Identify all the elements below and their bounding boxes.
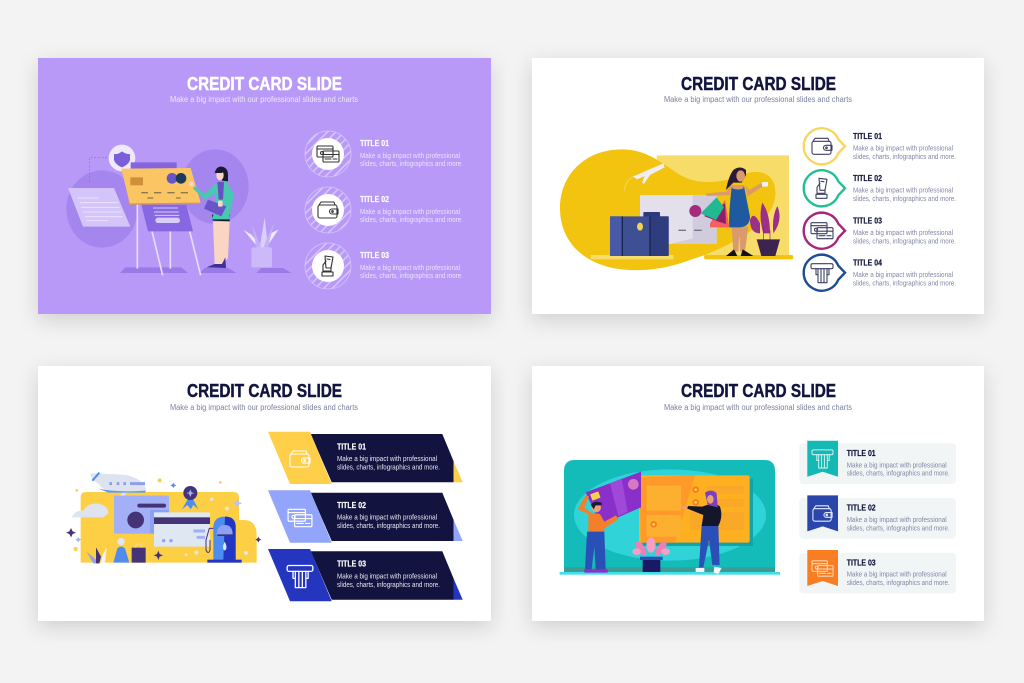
heading: slide 2 <box>664 74 852 104</box>
item 01: TITLE 01 <box>337 441 366 451</box>
item 01: TITLE 01 <box>847 448 876 458</box>
item 01: slides, charts, infographics and more. <box>853 154 956 161</box>
item 02 <box>305 187 463 233</box>
item 03: Make a big impact with professional <box>847 572 947 579</box>
item 02: slides, charts, infographics and more. <box>853 196 956 203</box>
list: items 1-4 speech circles <box>804 128 956 291</box>
item 01: Make a big impact with professional <box>337 456 437 463</box>
heading: slide 1: CREDIT CARD SLIDE <box>187 74 342 94</box>
heading: slide 1 <box>170 74 358 104</box>
illustration: woman shopping with suitcase <box>560 149 793 270</box>
item 03: slides, charts, infographics and more. <box>337 582 440 589</box>
item 02 <box>804 170 956 206</box>
panel: purple slide <box>38 58 491 314</box>
illustration: two people with card and dashboard <box>560 460 780 575</box>
item 03: Make a big impact with professional <box>337 573 437 580</box>
item 03: TITLE 03 <box>853 216 882 226</box>
item 02: Make a big impact with professional <box>847 517 947 524</box>
item 03: Make a big impact with professional <box>360 265 460 272</box>
list: items 1-3 purple <box>305 131 463 289</box>
panel: yellow illustration slide <box>532 58 984 314</box>
item 03 <box>268 549 463 601</box>
heading: slide 4: Make a big impact with our professional slides and charts <box>664 403 852 412</box>
item 02: slides, charts, infographics and more. <box>847 525 950 532</box>
item 03: slides, charts, infographics and more. <box>847 580 950 587</box>
heading: slide 3: CREDIT CARD SLIDE <box>187 381 342 401</box>
list: items 1-3 ribbon cards <box>799 441 956 593</box>
heading: slide 2: Make a big impact with our professional slides and charts <box>664 95 852 104</box>
item 01: TITLE 01 <box>360 138 389 148</box>
item 02: TITLE 02 <box>853 173 882 183</box>
item 03: Make a big impact with professional <box>853 230 953 237</box>
item 01: slides, charts, infographics and more. <box>360 161 463 168</box>
item 02: slides, charts, infographics and more. <box>337 523 440 530</box>
item 03: slides, charts, infographics and more. <box>360 273 463 280</box>
item 01: slides, charts, infographics and more. <box>847 471 950 478</box>
item 02: TITLE 02 <box>337 500 366 510</box>
illustration: woman presenting credit card <box>66 145 291 275</box>
item 03 <box>804 213 956 249</box>
item 01: Make a big impact with professional <box>360 153 460 160</box>
item 03: slides, charts, infographics and more. <box>853 238 956 246</box>
item 01 <box>799 441 956 484</box>
item 02 <box>268 490 463 543</box>
item 02: slides, charts, infographics and more. <box>360 217 463 224</box>
item 01: TITLE 01 <box>853 131 882 141</box>
item 03 <box>799 550 956 593</box>
heading: slide 4 <box>664 381 852 412</box>
item 03: TITLE 03 <box>847 557 876 567</box>
item 04: slides, charts, infographics and more. <box>853 280 956 288</box>
item 03 <box>305 243 463 289</box>
panel: teal illustration slide <box>532 366 984 621</box>
item 04: TITLE 04 <box>853 258 882 268</box>
heading: slide 3: Make a big impact with our professional slides and charts <box>170 403 358 412</box>
item 01 <box>305 131 463 177</box>
heading: slide 2: CREDIT CARD SLIDE <box>681 74 836 94</box>
list: items 1-3 banners <box>268 432 463 601</box>
item 01: Make a big impact with professional <box>847 462 947 469</box>
panel: parallelogram slide <box>38 366 491 621</box>
item 02: TITLE 02 <box>360 194 389 204</box>
illustration: travel and payment scene <box>66 473 261 563</box>
item 02: Make a big impact with professional <box>360 209 460 216</box>
item 04: Make a big impact with professional <box>853 272 953 279</box>
item 01: Make a big impact with professional <box>853 146 953 152</box>
item 04 <box>804 255 956 291</box>
item 01 <box>804 128 956 164</box>
item 01: slides, charts, infographics and more. <box>337 464 440 472</box>
item 02 <box>799 495 956 539</box>
item 03: TITLE 03 <box>360 250 389 260</box>
item 01 <box>268 432 463 484</box>
heading: slide 4: CREDIT CARD SLIDE <box>681 381 836 401</box>
item 02: Make a big impact with professional <box>337 515 437 522</box>
heading: slide 3 <box>170 381 358 412</box>
item 02: Make a big impact with professional <box>853 188 953 194</box>
item 03: TITLE 03 <box>337 559 366 569</box>
heading: slide 1: Make a big impact with our professional slides and charts <box>170 95 358 104</box>
item 02: TITLE 02 <box>847 503 876 513</box>
